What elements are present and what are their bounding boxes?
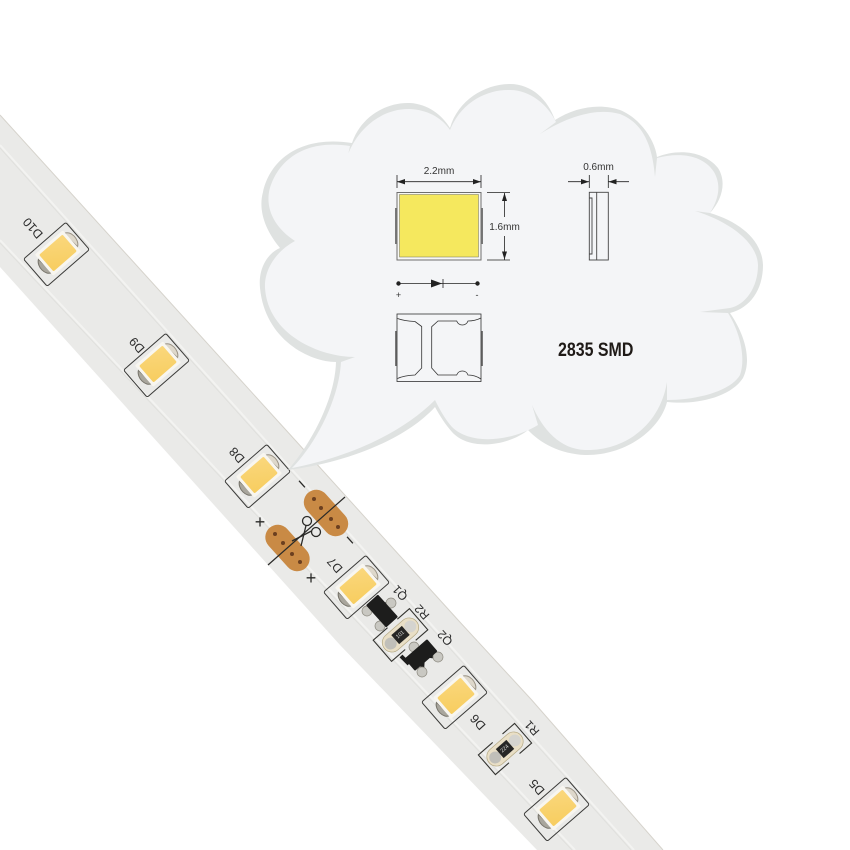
- diode symbol: +: [396, 290, 401, 300]
- transistor Q2: [401, 627, 456, 677]
- LED D10: D10: [20, 215, 46, 241]
- LED side view: [589, 192, 608, 260]
- side view LED diagram: [568, 162, 629, 260]
- LED D9: [124, 333, 189, 397]
- LED D8: D8: [226, 444, 248, 466]
- label R2: R2: [411, 601, 432, 622]
- LED top view: [395, 192, 483, 260]
- resistor R1: 224: [500, 744, 510, 754]
- solder pad positive: [260, 520, 315, 576]
- label R1: R1: [521, 717, 542, 738]
- solder pads and cut mark: [260, 485, 353, 576]
- resistor R2: 101: [395, 630, 406, 640]
- LED D9: D9: [126, 334, 148, 356]
- transistor Q1: Q1: [389, 582, 411, 604]
- polarity mark plus bottom: +: [306, 568, 316, 588]
- dimension 1.6mm: 1.6mm: [489, 222, 520, 233]
- polarity mark plus left: +: [255, 512, 265, 532]
- diode symbol: [396, 279, 480, 300]
- polarity mark minus right: −: [339, 529, 361, 551]
- transistor Q2: Q2: [434, 627, 456, 649]
- strip base: [0, 115, 663, 850]
- LED bottom view: [395, 314, 483, 382]
- heading: 2835 SMD: 2835 SMD: [558, 339, 633, 360]
- LED D6: [422, 665, 489, 733]
- dimension 2.2mm: 2.2mm: [424, 166, 454, 177]
- LED D7: D7: [324, 554, 346, 576]
- LED D8: [225, 444, 290, 508]
- dimension 0.6mm: 0.6mm: [583, 162, 614, 173]
- polarity mark minus top: −: [291, 473, 313, 495]
- LED D10: [20, 215, 89, 286]
- LED D5: D5: [526, 776, 548, 798]
- transistor Q1: [362, 582, 411, 631]
- LED strip: [0, 115, 663, 850]
- solder pad negative: [299, 485, 353, 541]
- cloud outline: [260, 84, 763, 470]
- resistor R2: [373, 609, 428, 661]
- LED D7: [324, 554, 389, 619]
- resistor R1: [478, 723, 532, 775]
- diode symbol: -: [476, 290, 478, 300]
- speech bubble cloud: [260, 84, 763, 470]
- cloud fill: [265, 90, 758, 468]
- top view LED diagram: [395, 166, 520, 260]
- LED D5: [524, 776, 589, 841]
- LED D6: D6: [467, 711, 489, 733]
- icon: scissors: [292, 516, 320, 546]
